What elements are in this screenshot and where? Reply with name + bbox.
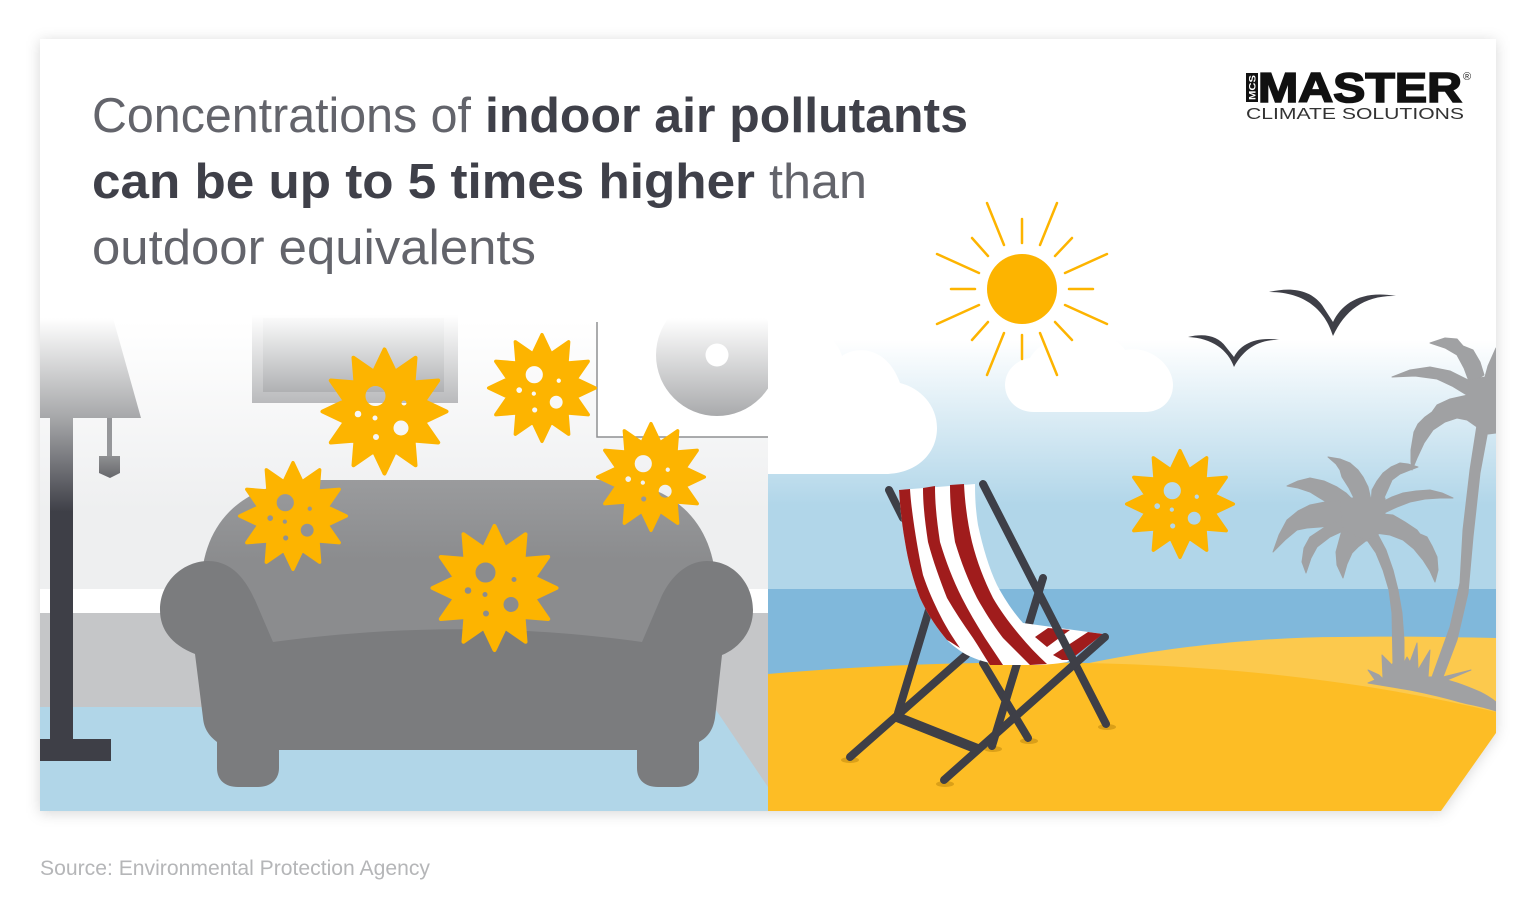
front sand [768, 662, 1496, 811]
logo badge [1246, 73, 1258, 102]
title line 1 [92, 89, 968, 143]
sea [768, 589, 1496, 674]
title line 1: indoor air pollutants [485, 89, 968, 143]
virus 1 [322, 350, 446, 474]
grass and mound [1368, 643, 1496, 711]
foot shadows [841, 724, 1116, 787]
wall [40, 410, 768, 589]
rear frame [850, 490, 1043, 757]
virus 3 [598, 424, 704, 530]
cloud right [1005, 357, 1173, 412]
back sand [1088, 636, 1496, 712]
sun [937, 203, 1107, 375]
title line 1: Concentrations of [92, 89, 471, 143]
virus 5 [432, 526, 556, 650]
logo tagline: CLIMATE SOLUTIONS [1246, 106, 1464, 123]
title line 2: than [769, 155, 867, 209]
wall air conditioner panel [596, 322, 768, 438]
rug [40, 707, 768, 811]
birds [1188, 290, 1396, 367]
palm trees [1273, 338, 1496, 711]
title [92, 89, 968, 275]
picture on wall [252, 315, 458, 403]
virus 2 [489, 335, 595, 441]
floor lamp [40, 318, 141, 761]
panel: outdoor beach [768, 203, 1496, 811]
floor [40, 613, 768, 787]
sky [768, 357, 1496, 589]
small palm [1273, 457, 1453, 665]
big palm [1392, 338, 1496, 677]
virus particles indoors [240, 335, 704, 650]
virus particle outdoors [1127, 451, 1233, 557]
title line 3: outdoor equivalents [92, 221, 536, 275]
sofa [160, 480, 753, 787]
virus 4 [240, 463, 346, 569]
skirting board [40, 589, 768, 590]
panel: indoor room [40, 294, 778, 811]
canvas [899, 484, 1103, 665]
canvas red stripes [899, 484, 1103, 665]
logo [1246, 64, 1471, 123]
logo registered mark: ® [1463, 71, 1471, 83]
logo badge text: MCS [1248, 75, 1258, 100]
cloud left [768, 357, 937, 474]
source note: Source: Environmental Protection Agency [40, 857, 431, 880]
logo wordmark: MASTER [1258, 64, 1462, 111]
front frame [897, 484, 1106, 780]
deck chair [841, 484, 1116, 787]
title line 2: can be up to 5 times higher [92, 155, 755, 209]
